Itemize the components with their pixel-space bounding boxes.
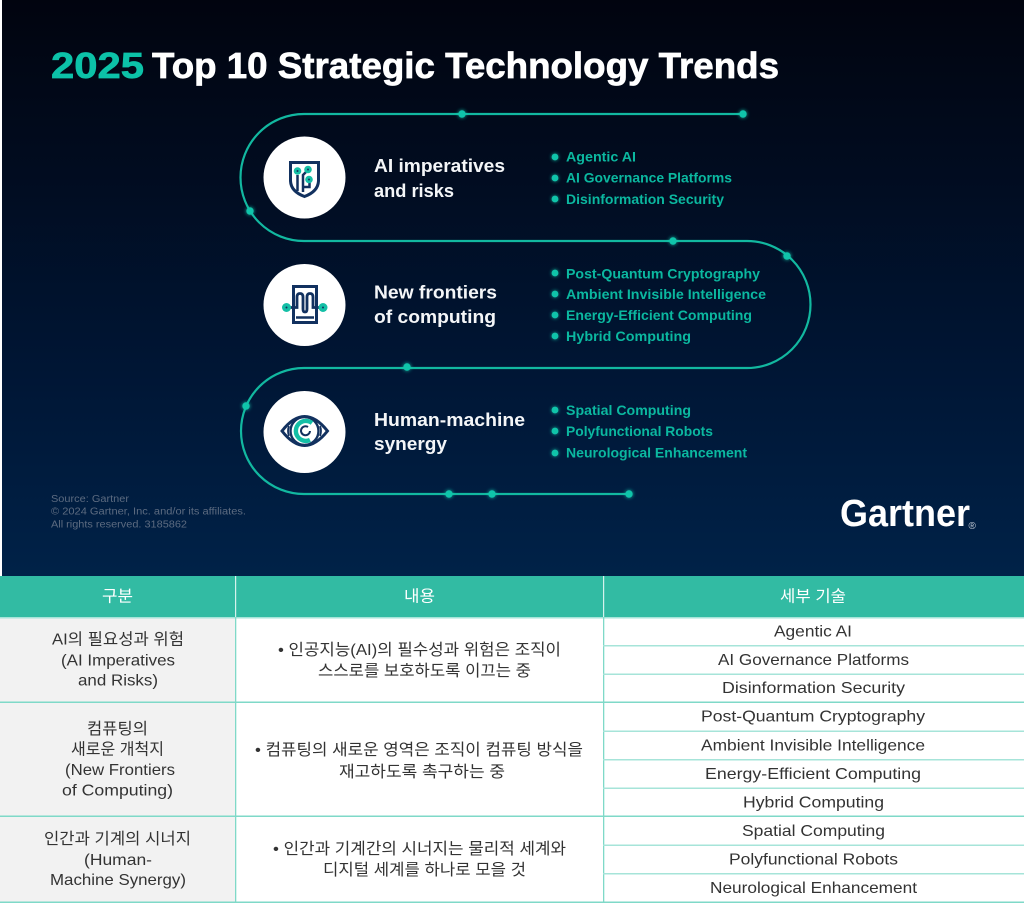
row 3 category: Machine Synergy) <box>50 872 186 889</box>
detailed technology list: Disinformation Security <box>722 680 905 697</box>
bullet list: AI imperatives: Agentic AI <box>566 148 636 164</box>
category label: new frontiers <box>374 282 497 327</box>
row 3 description: • 인간과 기계간의 시너지는 물리적 세계와 <box>273 840 566 858</box>
source note: Source: Gartner <box>51 494 130 505</box>
row 1 category: AI의 필요성과 위험 <box>52 630 184 648</box>
bullet list: human-machine <box>551 402 747 460</box>
row 3 category: 인간과 기계의 시너지 <box>44 830 191 848</box>
row 2 category: 새로운 개척지 <box>71 740 164 758</box>
row 2 category <box>62 720 175 800</box>
row 2 description <box>255 741 583 781</box>
bullet list: human-machine: Spatial Computing <box>566 402 691 418</box>
bullet list: human-machine: Polyfunctional Robots <box>566 423 713 439</box>
banner background <box>2 0 1024 577</box>
category label: new frontiers: New frontiers <box>374 282 497 302</box>
category label: human-machine: synergy <box>374 434 447 454</box>
detailed technology list <box>701 624 925 897</box>
icon: computing chip <box>264 264 346 346</box>
row 2 category: 컴퓨팅의 <box>87 720 148 738</box>
panel: summary table <box>0 576 1024 903</box>
row 1 description: 스스로를 보호하도록 이끄는 중 <box>318 662 531 680</box>
bullet list: new frontiers: Ambient Invisible Intelligence <box>566 286 766 302</box>
table header row: 내용 <box>404 588 435 606</box>
row 3 category: (Human- <box>84 852 152 869</box>
detailed technology list: Neurological Enhancement <box>710 880 918 897</box>
source note: All rights reserved. 3185862 <box>51 520 187 530</box>
bullet list: new frontiers: Hybrid Computing <box>566 328 691 344</box>
detailed technology list: Post-Quantum Cryptography <box>701 708 925 726</box>
bullet list: AI imperatives <box>551 148 732 207</box>
detailed technology list: Hybrid Computing <box>743 794 884 812</box>
category label: human-machine <box>374 410 525 454</box>
connector dots <box>242 110 792 498</box>
detailed technology list: Energy-Efficient Computing <box>705 766 921 783</box>
category label: AI imperatives: AI imperatives <box>374 156 505 176</box>
row 2 description: 재고하도록 촉구하는 중 <box>339 763 505 781</box>
table grid lines <box>0 617 1024 903</box>
row 1 category: (AI Imperatives <box>61 652 175 670</box>
Gartner logo: Gartner <box>840 493 970 535</box>
row 1 description: • 인공지능(AI)의 필수성과 위험은 조직이 <box>278 641 561 659</box>
category label: human-machine: Human-machine <box>374 410 525 430</box>
table header row <box>0 576 1024 617</box>
icon: eye <box>264 391 346 473</box>
bullet list: AI imperatives: Disinformation Security <box>566 191 724 207</box>
row 2 description: • 컴퓨팅의 새로운 영역은 조직이 컴퓨팅 방식을 <box>255 741 583 759</box>
source note: © 2024 Gartner, Inc. and/or its affiliates. <box>51 506 246 518</box>
row 3 category <box>44 830 191 889</box>
detailed technology list: Ambient Invisible Intelligence <box>701 738 925 754</box>
title: Top 10 Strategic Technology Trends <box>152 45 779 86</box>
bullet list: new frontiers <box>551 266 766 344</box>
detailed technology list: AI Governance Platforms <box>718 652 909 669</box>
bullet list: human-machine: Neurological Enhancement <box>566 444 747 460</box>
table header row: 구분 <box>102 588 133 606</box>
row 3 description <box>273 840 566 879</box>
source note <box>51 494 246 530</box>
row 1 description <box>278 641 561 680</box>
category label: AI imperatives: and risks <box>374 181 454 201</box>
winding connector line <box>240 114 810 494</box>
first column background <box>0 617 235 902</box>
row 2 category: (New Frontiers <box>65 762 175 779</box>
bullet list: new frontiers: Post-Quantum Cryptography <box>566 266 760 282</box>
detailed technology list: Polyfunctional Robots <box>729 852 898 868</box>
panel: Gartner hero banner <box>2 0 1024 577</box>
row 1 category <box>52 630 184 690</box>
row 3 description: 디지털 세계를 하나로 모을 것 <box>323 861 526 879</box>
bullet list: AI imperatives: AI Governance Platforms <box>566 170 732 186</box>
detailed technology list: Spatial Computing <box>742 823 885 840</box>
icon: shield with circuit <box>264 136 346 218</box>
bullet list: new frontiers: Energy-Efficient Computing <box>566 307 752 323</box>
category label: new frontiers: of computing <box>374 307 496 327</box>
table header row: 세부 기술 <box>780 588 846 606</box>
row 1 category: and Risks) <box>78 672 158 690</box>
row 2 category: of Computing) <box>62 782 173 800</box>
title: 2025 <box>51 45 144 86</box>
category label: AI imperatives <box>374 156 505 201</box>
Gartner logo: ® <box>968 521 976 532</box>
detailed technology list: Agentic AI <box>774 624 852 640</box>
